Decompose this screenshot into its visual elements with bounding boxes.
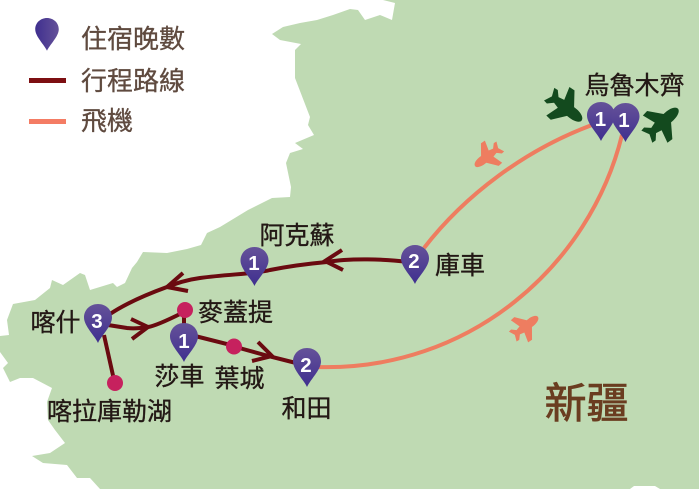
pin: Kuche [401, 245, 429, 284]
label: Aksu: 阿克蘇 [260, 222, 335, 250]
legend [29, 18, 185, 136]
plane: dark right [634, 95, 691, 151]
pin: Yarkand: 1 [178, 330, 190, 353]
label: Makit: 麥蓋提 [198, 299, 273, 327]
label: Yarkand: 莎車 [154, 363, 205, 391]
stop: Karakul Lake [107, 375, 123, 391]
arrowhead [131, 319, 148, 339]
legend pin icon [35, 18, 59, 51]
pin: Hotan: 2 [300, 354, 312, 377]
flight: Urumqi to Hotan [316, 135, 622, 367]
pin: Urumqi left: 1 [595, 108, 606, 131]
route: Kuche to Kashgar [110, 259, 408, 314]
route: Kashgar to Karakul [104, 335, 114, 380]
label: Hotan: 和田 [282, 395, 332, 423]
legend label: flight: 飛機 [81, 106, 133, 136]
stop: Kargilik [226, 338, 242, 354]
pin: Kashgar: 3 [91, 310, 103, 333]
pin: Kashgar [84, 304, 112, 343]
legend label: route: 行程路線 [81, 66, 185, 96]
label: Urumqi: 烏魯木齊 [584, 72, 685, 100]
plane: orange upper [466, 135, 509, 177]
legend label: nights: 住宿晚數 [81, 24, 185, 54]
overland routes [104, 250, 408, 380]
route: Makit to Yarkand [182, 312, 186, 330]
pin: Urumqi left [587, 102, 615, 141]
label: Karakul Lake: 喀拉庫勒湖 [47, 398, 172, 426]
region title: 新疆 [544, 380, 629, 427]
pin: Kuche: 2 [408, 250, 420, 273]
pin: Yarkand [170, 323, 198, 362]
legend line: flight [29, 119, 66, 124]
pin: Urumqi right: 1 [618, 109, 630, 132]
arrowhead [167, 273, 188, 291]
arrowhead [252, 342, 272, 361]
pin: Aksu: 1 [248, 252, 260, 275]
label: Kuche: 庫車 [435, 252, 485, 280]
plane: orange lower [504, 306, 547, 348]
route: Kashgar to Makit [108, 313, 182, 328]
plane: dark left [537, 79, 594, 135]
route: Yarkand to Hotan [195, 336, 300, 364]
pin: Aksu [240, 247, 268, 286]
flight routes [316, 125, 622, 367]
legend line: route [29, 78, 66, 83]
label: Kashgar: 喀什 [30, 309, 81, 337]
stop: Makit [177, 302, 193, 318]
label: Kargilik: 葉城 [214, 365, 265, 393]
pin: Hotan [293, 348, 321, 387]
pin: Urumqi right [612, 103, 640, 142]
flight: Kuche to Urumqi [424, 125, 592, 248]
arrowhead [325, 250, 343, 270]
